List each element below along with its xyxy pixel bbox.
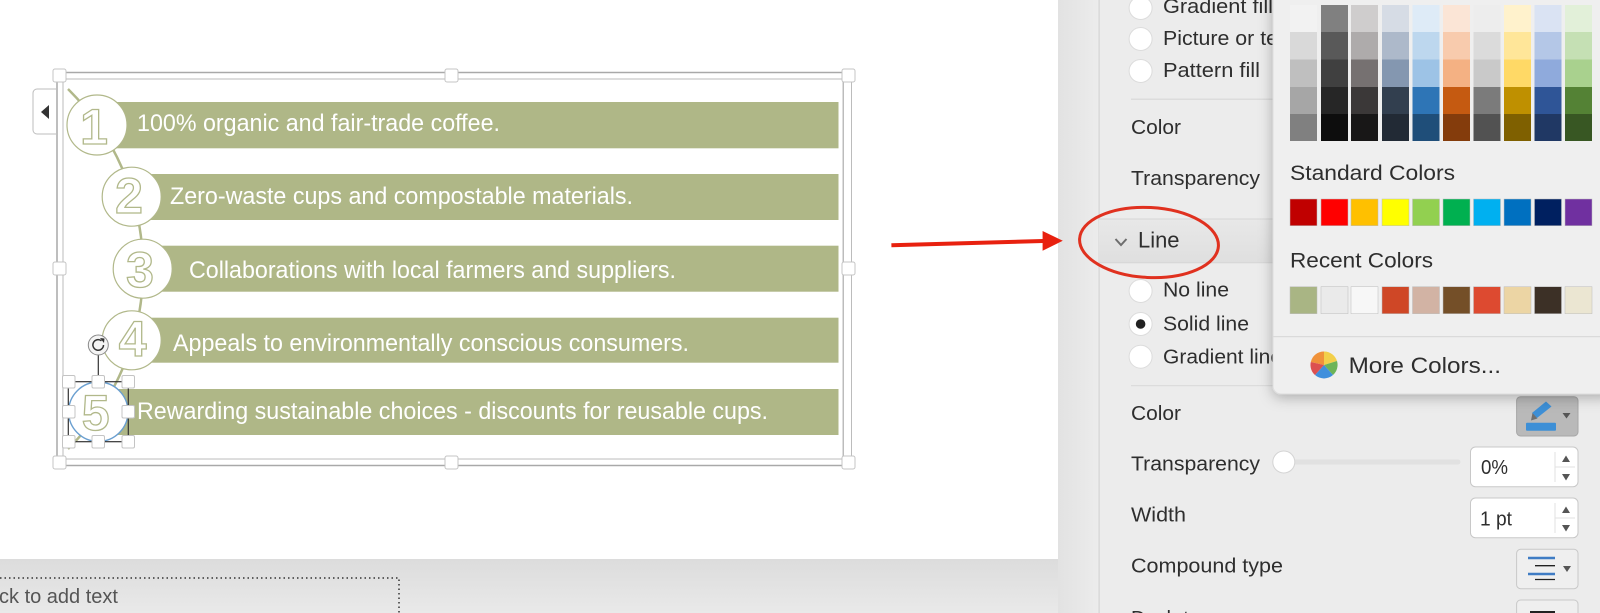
list item 3 [113,239,838,298]
notes area: ck to add text [0,586,118,608]
list item 5 with selected circle [62,335,838,448]
format panel background [1058,0,1600,613]
list item 5 with selected circle: Rewarding sustainable choices - discounts for reusable cups. [137,398,768,425]
fill options: Color [1131,117,1181,139]
line section header: Line [1138,227,1180,252]
transparency row: Transparency [1131,454,1260,476]
list item 1 [67,95,838,155]
fill options [1129,0,1278,190]
width row: Width [1131,505,1186,527]
standard colour swatches [1290,199,1592,226]
transparency row: 0% [1481,457,1508,479]
red highlight ellipse around Line [1078,204,1220,281]
colour picker popup [1273,0,1600,394]
list item 5 with selected circle: 5 [82,385,110,441]
recent colors heading: Recent Colors [1290,250,1433,273]
transparency row [1131,447,1578,487]
notes area [0,559,1058,613]
fill options: Transparency [1131,168,1260,190]
line color row [1131,397,1578,436]
standard colors heading: Standard Colors [1290,162,1455,185]
compound type row: Compound type [1131,556,1283,578]
list item 1: 1 [80,99,108,155]
line color row: Color [1131,403,1181,425]
line options [1129,280,1600,386]
line section header [1099,219,1279,263]
fill options: Picture or te [1163,28,1278,50]
list item 1: 100% organic and fair-trade coffee. [137,110,500,137]
curved connector line [68,89,143,449]
list item 2 [102,167,838,226]
list item 3: Collaborations with local farmers and suppliers. [189,257,676,284]
list item 2: 2 [115,168,143,224]
icon: colour wheel [1310,351,1338,378]
line options: Solid line [1163,314,1249,336]
theme colour swatches [1290,5,1592,141]
recent colour swatches [1290,287,1592,314]
collapse tab [33,89,56,134]
fill options: Pattern fill [1163,60,1260,82]
list item 2: Zero-waste cups and compostable materials. [170,183,633,210]
list item 4: Appeals to environmentally conscious consumers. [173,330,689,357]
dash type row [1131,600,1578,613]
slide canvas [0,0,1058,559]
list item 4: 4 [119,311,147,367]
selection frame [53,69,855,469]
red arrow pointing to Line [891,231,1063,251]
line options: No line [1163,280,1229,302]
more colors label: More Colors... [1349,353,1501,378]
list item 3: 3 [126,242,154,298]
compound type row [1131,549,1578,589]
line options: Gradient line [1163,346,1282,368]
width row [1131,498,1578,538]
list item 4 [102,311,838,370]
width row: 1 pt [1480,508,1512,530]
